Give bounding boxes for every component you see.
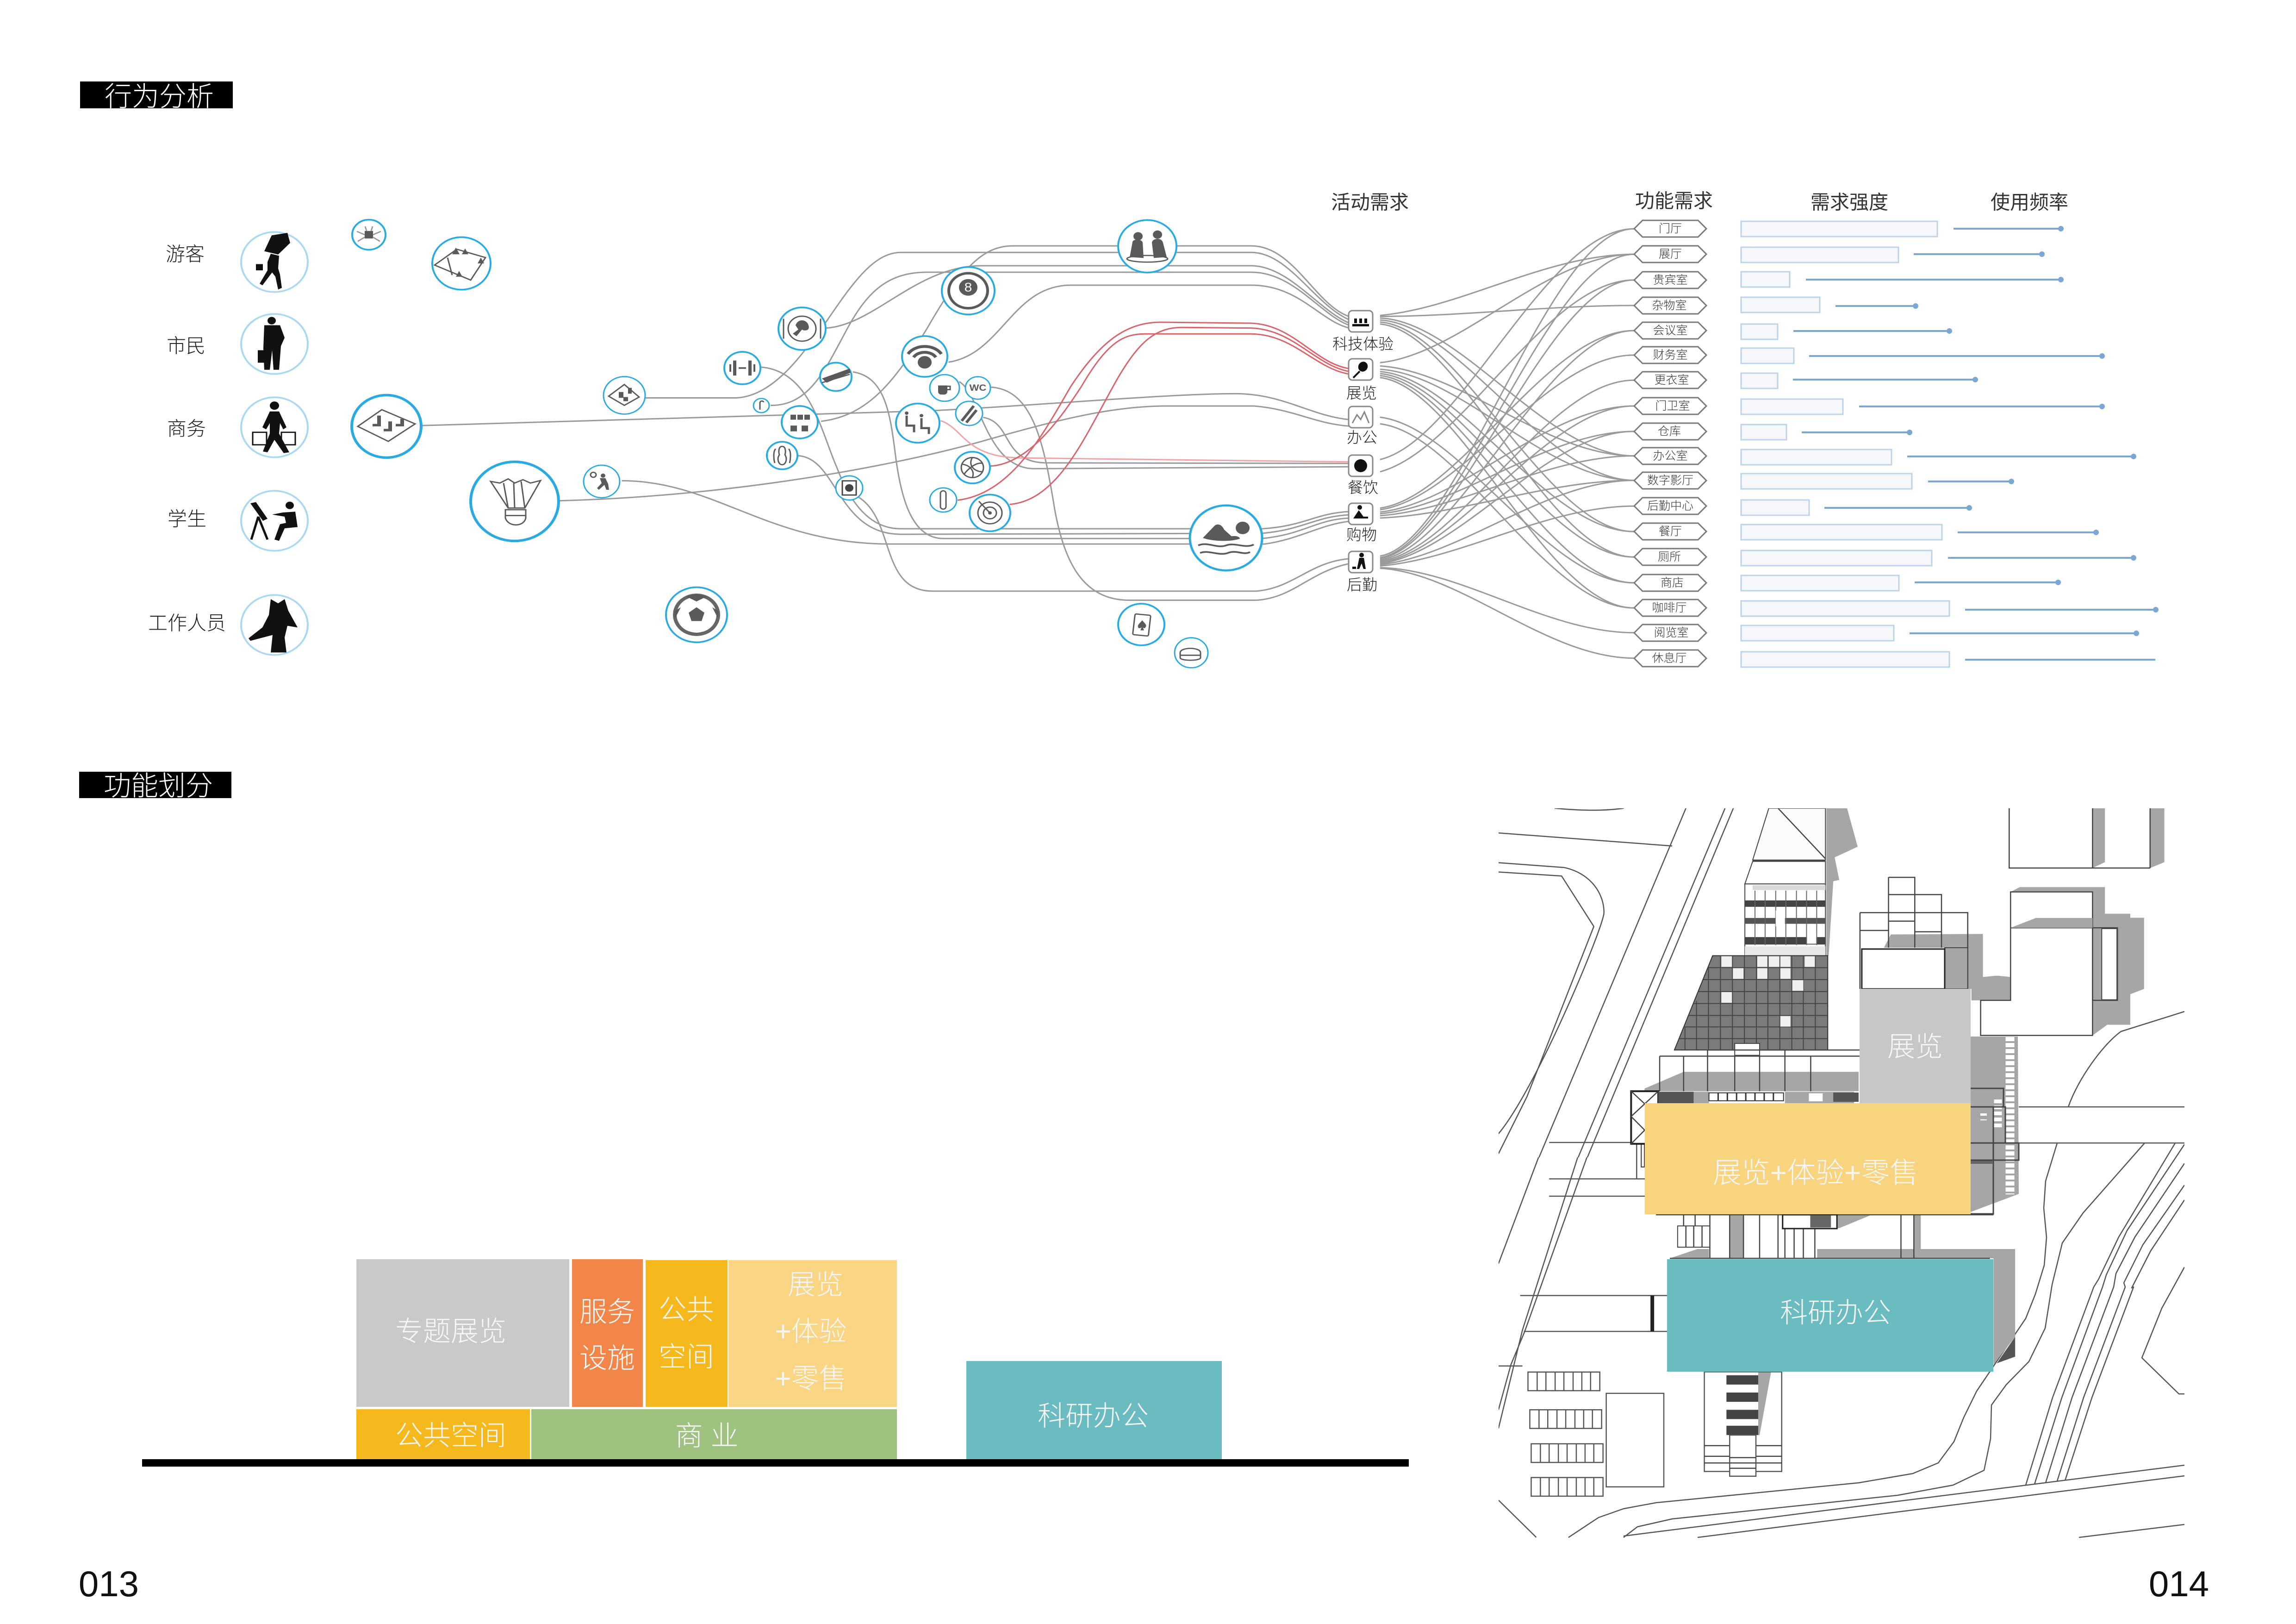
- tag: 阅览室: [1634, 625, 1706, 641]
- tag: 咖啡厅: [1634, 600, 1706, 616]
- east stair and shadow block: [1971, 1037, 2019, 1214]
- roads west lower: [1499, 1157, 1667, 1537]
- demand intensity bars: [1741, 221, 1949, 667]
- block: 科研办公: [966, 1361, 1222, 1459]
- tag: 阅览室: 阅览室: [1654, 626, 1689, 639]
- usage frequency lines: [1793, 226, 2159, 660]
- podium detail lower: [1656, 1215, 1993, 1258]
- node: 餐饮: [1348, 455, 1378, 496]
- block: 商业: 商 业: [675, 1420, 738, 1452]
- tag: 数字影厅: 数字影厅: [1647, 474, 1693, 487]
- section diagram of functions: [142, 1259, 1409, 1467]
- activity demand heading: 活动需求: [1331, 192, 1409, 213]
- plan block: 展览+体验+零售: [1645, 1103, 1971, 1214]
- block: 公共空间 upper: 空间: [659, 1342, 714, 1372]
- tag: 休息厅: 休息厅: [1652, 652, 1687, 665]
- icon: bowling: [767, 442, 797, 469]
- block: 展览+体验+零售: [728, 1260, 897, 1407]
- tag: 门厅: [1634, 220, 1706, 237]
- block: 科研办公: 科研办公: [1038, 1401, 1149, 1431]
- icon: volleyball: [955, 452, 990, 483]
- persona: 市民: [167, 314, 308, 374]
- block: 商业: [531, 1409, 897, 1459]
- tag: 后勤中心: 后勤中心: [1647, 500, 1693, 512]
- block: 服务设施: 服务: [579, 1296, 635, 1328]
- persona: 市民: 市民: [167, 335, 205, 356]
- separator and parking: [1528, 1295, 1664, 1496]
- node: 办公: [1347, 406, 1377, 446]
- page number 013: 013: [79, 1563, 139, 1604]
- dark facade grid: [1674, 956, 1828, 1050]
- icon: plan small: [604, 377, 645, 414]
- left flow lines: activities to demands: [391, 246, 1350, 600]
- page number 014: 014: [2149, 1563, 2209, 1604]
- persona: 学生: 学生: [168, 508, 206, 530]
- block: 公共空间 lower: [356, 1409, 530, 1459]
- tag: 商店: [1634, 575, 1706, 591]
- persona: 游客: [166, 232, 308, 292]
- icon: handle: [753, 399, 769, 412]
- icon: wifi: [902, 336, 947, 377]
- east building outlines: [1860, 808, 2150, 1036]
- tag: 展厅: [1634, 246, 1706, 262]
- icon: target: [970, 494, 1010, 531]
- tag: 餐厅: [1634, 523, 1706, 540]
- icon: wc: WC: [970, 383, 986, 393]
- node: 展览: 展览: [1346, 384, 1377, 402]
- heading: 行为分析: 行为分析: [105, 81, 214, 112]
- plan block: 展览+体验+零售: 展览+体验+零售: [1713, 1157, 1918, 1189]
- block: 展览+体验+零售: 展览: [788, 1269, 843, 1300]
- node: 后勤: [1347, 551, 1377, 593]
- icon: curling: [1175, 638, 1208, 668]
- icon: eight ball: 8: [964, 281, 972, 294]
- persona: 商务: [167, 397, 308, 457]
- tag: 数字影厅: [1634, 472, 1706, 489]
- tag: 杂物室: [1634, 297, 1706, 314]
- block: 公共空间 lower: 公共空间: [395, 1420, 506, 1451]
- tag: 会议室: 会议室: [1653, 324, 1688, 337]
- block: 公共空间 upper: [646, 1260, 728, 1407]
- tag: 门厅: 门厅: [1659, 222, 1682, 235]
- tag: 餐厅: 餐厅: [1659, 525, 1682, 538]
- icon: plan large: [352, 395, 421, 457]
- icon: seats: [782, 406, 818, 438]
- tag: 杂物室: 杂物室: [1652, 299, 1687, 312]
- block: 服务设施: 设施: [579, 1343, 635, 1374]
- node: 科技体验: 科技体验: [1332, 335, 1394, 353]
- icon: park: [432, 237, 491, 290]
- tag: 会议室: [1634, 322, 1706, 339]
- tag: 更衣室: [1634, 372, 1706, 388]
- tag: 仓库: 仓库: [1658, 425, 1681, 438]
- roads upper: [1499, 808, 1733, 1196]
- persona: 游客: 游客: [166, 244, 205, 265]
- icon: cutlery: [956, 401, 983, 425]
- block: 服务设施: [572, 1259, 643, 1407]
- activity circles: [352, 220, 1262, 668]
- node: 科技体验: [1332, 311, 1394, 353]
- roads east: [1568, 1012, 2184, 1537]
- tag: 厕所: 厕所: [1658, 550, 1681, 563]
- north tower: [1745, 808, 1825, 956]
- persona: 工作人员: 工作人员: [148, 612, 226, 634]
- tag: 财务室: 财务室: [1653, 349, 1688, 362]
- usage frequency heading: 使用频率: [1991, 192, 2068, 213]
- node: 餐饮: 餐饮: [1348, 479, 1378, 496]
- icon: crab: [352, 220, 386, 250]
- icon: plate: [778, 307, 826, 350]
- icon: swimmer: [1190, 506, 1262, 570]
- tag: 仓库: [1634, 423, 1706, 440]
- node: 后勤: 后勤: [1347, 576, 1377, 593]
- node: 购物: [1346, 503, 1377, 543]
- block: 展览+体验+零售: +体验: [775, 1316, 847, 1347]
- plan block: 科研办公: [1667, 1259, 1993, 1372]
- red flow lines: [958, 322, 1350, 505]
- function demand hexagon list: [1634, 220, 1706, 667]
- tag: 门卫室: 门卫室: [1655, 400, 1690, 412]
- persona labels and icons: [148, 232, 308, 655]
- persona: 工作人员: [148, 595, 308, 655]
- tag: 商店: 商店: [1661, 576, 1684, 589]
- icon: playing cards: [1118, 604, 1164, 645]
- tag: 休息厅: [1634, 650, 1706, 667]
- icon: runner tennis: [584, 465, 620, 498]
- demand intensity heading: 需求强度: [1811, 192, 1888, 213]
- block: 公共空间 upper: 公共: [659, 1294, 714, 1325]
- plan block: 展览: [1860, 989, 1971, 1103]
- plan block: 展览: 展览: [1887, 1031, 1943, 1062]
- tag: 厕所: [1634, 549, 1706, 565]
- site plan drawing: [1499, 808, 2184, 1537]
- icon: cup: [930, 375, 959, 401]
- function demand heading: 功能需求: [1635, 190, 1713, 212]
- tag: 后勤中心: [1634, 498, 1706, 514]
- icon: washer: [836, 476, 863, 500]
- node: 展览: [1346, 359, 1377, 402]
- right flow lines: activity to function: [1380, 229, 1634, 658]
- plan block: 科研办公: 科研办公: [1780, 1297, 1891, 1329]
- site shadows upper: [1644, 808, 2165, 1091]
- icon: waiting people: [896, 404, 940, 443]
- persona: 商务: 商务: [167, 418, 206, 440]
- persona: 学生: [168, 491, 308, 551]
- block: 专题展览: 专题展览: [395, 1316, 506, 1347]
- node: 购物: 购物: [1346, 526, 1377, 543]
- icon: football: [666, 587, 727, 642]
- tag: 更衣室: 更衣室: [1654, 374, 1689, 387]
- icon: skateboard: [930, 488, 957, 512]
- tag: 贵宾室: [1634, 272, 1706, 288]
- icon: wc: [965, 377, 990, 399]
- tag: 财务室: [1634, 347, 1706, 363]
- heading: 功能划分: 功能划分: [104, 771, 213, 801]
- tag: 办公室: [1634, 448, 1706, 464]
- icon: iron: [820, 362, 852, 391]
- icon: eight ball: [942, 267, 995, 314]
- tag: 贵宾室: 贵宾室: [1653, 274, 1688, 287]
- tag: 门卫室: [1634, 398, 1706, 414]
- south tower: [1705, 1372, 1782, 1476]
- tag: 展厅: 展厅: [1659, 248, 1682, 261]
- block: 展览+体验+零售: +零售: [775, 1363, 847, 1394]
- activity demand nodes: [1332, 311, 1394, 593]
- icon: diners: [1118, 220, 1176, 273]
- icon: shuttlecock: [471, 462, 559, 541]
- tag: 咖啡厅: 咖啡厅: [1652, 601, 1687, 614]
- ground line: [142, 1459, 1409, 1467]
- node: 办公: 办公: [1347, 429, 1377, 446]
- icon: dumbbell: [724, 352, 760, 384]
- block: 专题展览: [356, 1259, 569, 1407]
- tag: 办公室: 办公室: [1653, 450, 1688, 462]
- central podium: [1631, 1043, 1860, 1144]
- shadow behind research block: [1670, 1214, 2015, 1435]
